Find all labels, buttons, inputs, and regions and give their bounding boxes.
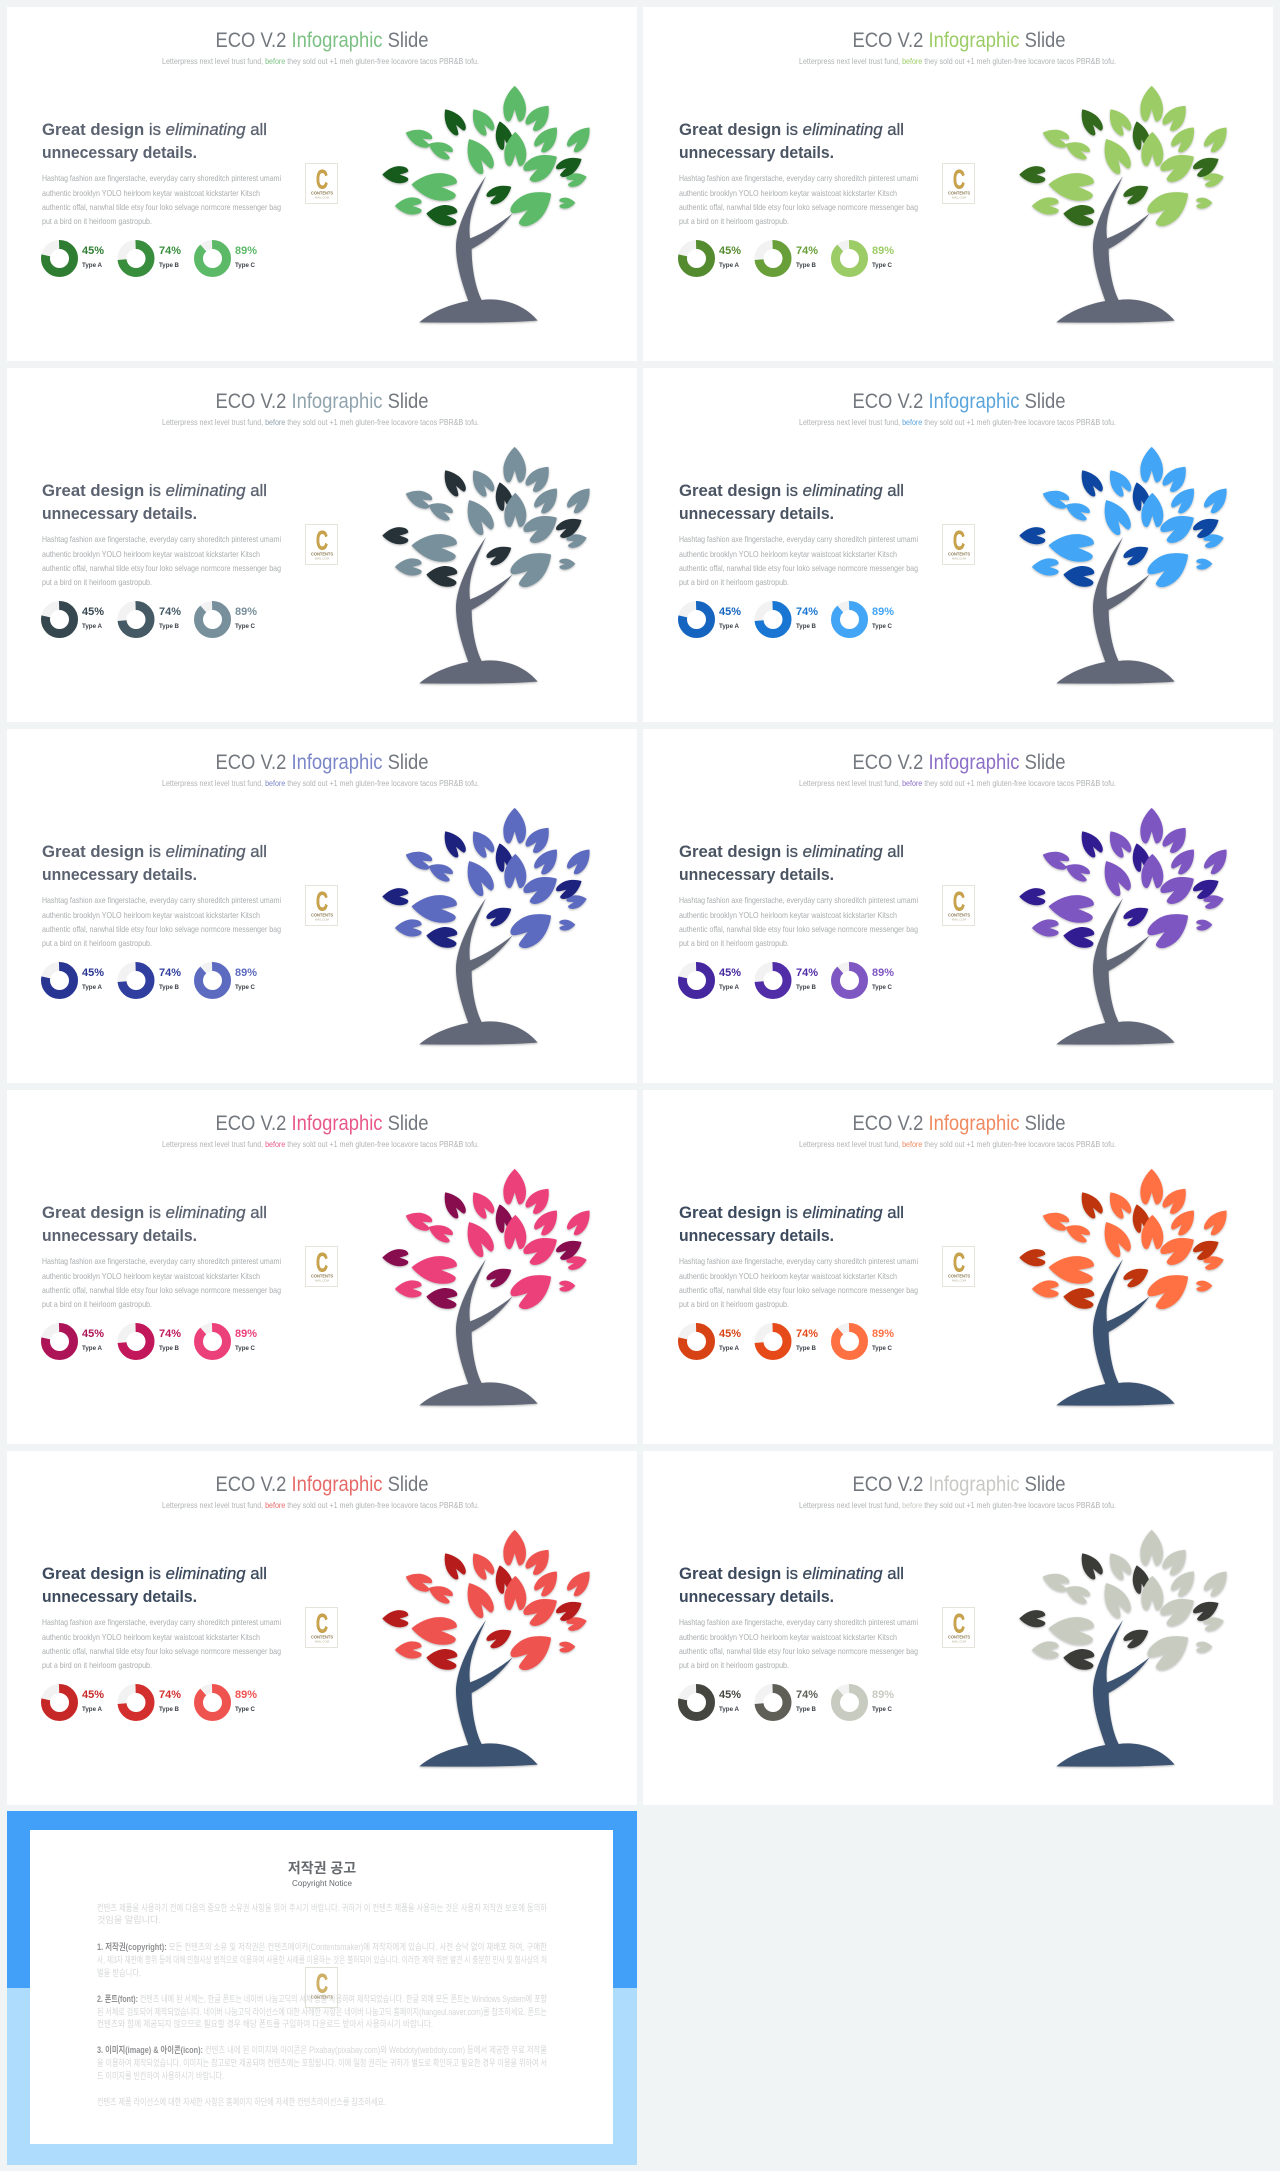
donut: Type B 74%: Type B <box>796 984 816 991</box>
donut: Type B 74%: Type B <box>159 623 179 630</box>
title: ECO V.2 Infographic Slide <box>852 1473 1065 1496</box>
tree illustration <box>382 447 596 684</box>
body text: authentic brooklyn YOLO heirloom keytar waistcoat kickstarter Kitsch <box>42 549 260 559</box>
panel: pink slide <box>7 1090 637 1444</box>
body text: authentic offal, narwhal tilde etsy four loko selvage normcore messenger bag <box>42 924 281 934</box>
heading: unnecessary details. <box>42 1587 197 1606</box>
heading: Great design is eliminating all <box>42 120 267 139</box>
body text: authentic offal, narwhal tilde etsy four loko selvage normcore messenger bag <box>42 202 281 212</box>
donut: Type A 45%: 45% <box>719 606 741 618</box>
body text: Hashtag fashion axe fingerstache, everyday carry shoreditch pinterest umami <box>42 534 281 544</box>
body text <box>42 1617 281 1670</box>
logo badge <box>942 164 974 204</box>
body text: authentic offal, narwhal tilde etsy four loko selvage normcore messenger bag <box>42 1646 281 1656</box>
logo badge: C <box>316 164 328 194</box>
heading: unnecessary details. <box>679 865 834 884</box>
donut: Type A 45%: 45% <box>719 1328 741 1340</box>
donut: Type C 89%: 89% <box>872 967 894 979</box>
title: ECO V.2 Infographic Slide <box>852 751 1065 774</box>
donut: Type A 45%: Type A <box>719 1706 739 1713</box>
body text: Hashtag fashion axe fingerstache, everyday carry shoreditch pinterest umami <box>679 1256 918 1266</box>
donut: Type A 45%: Type A <box>82 623 102 630</box>
logo badge: MAIL.COM <box>952 918 966 922</box>
donut: Type C 89% <box>836 606 894 634</box>
donut: Type B 74%: 74% <box>796 606 818 618</box>
donut: Type C 89%: Type C <box>235 262 255 269</box>
donut: Type A 45%: Type A <box>719 984 739 991</box>
panel: red slide <box>7 1451 637 1805</box>
panel background <box>7 1090 637 1444</box>
body text <box>42 895 281 948</box>
subtitle: Letterpress next level trust fund, before they sold out +1 meh gluten-free locavore tacos PBR&B tofu. <box>162 1501 479 1510</box>
panel: orange slide <box>643 1090 1273 1444</box>
donut: Type B 74% <box>122 606 181 634</box>
donut: Type B 74%: 74% <box>796 967 818 979</box>
logo badge: C <box>316 886 328 916</box>
body text: put a bird on it heirloom gastropub. <box>42 216 152 226</box>
section 1: copyright: 1. 저작권(copyright): 모든 컨텐츠의 소유 및 저작권은 컨텐츠메이커(Contentsmaker)에 저작자에게 있습니다. 사전 승낙 없이 재배포 하여, 구매한 <box>97 1941 547 1952</box>
heading: Great design is eliminating all <box>42 481 267 500</box>
body text: put a bird on it heirloom gastropub. <box>679 1299 789 1309</box>
heading <box>42 1564 267 1606</box>
tree illustration <box>1019 1530 1233 1767</box>
donut: Type C 89% <box>836 1688 894 1716</box>
donut: Type B 74%: Type B <box>159 262 179 269</box>
heading: Great design is eliminating all <box>679 481 904 500</box>
tree illustration <box>1019 808 1233 1045</box>
donut: Type C 89%: Type C <box>872 262 892 269</box>
panel: lime slide <box>643 7 1273 361</box>
donut: Type A 45% <box>682 1328 741 1356</box>
donut: Type C 89%: Type C <box>872 1345 892 1352</box>
body text: put a bird on it heirloom gastropub. <box>42 1299 152 1309</box>
blue frame top <box>7 1811 637 1988</box>
body text: authentic offal, narwhal tilde etsy four loko selvage normcore messenger bag <box>679 924 918 934</box>
donut: Type A 45% <box>682 244 741 272</box>
panel background <box>7 7 637 361</box>
section 1: copyright <box>97 1941 547 1978</box>
intro paragraph <box>97 1902 548 1925</box>
body text <box>42 534 281 587</box>
body text: authentic offal, narwhal tilde etsy four loko selvage normcore messenger bag <box>679 202 918 212</box>
logo badge: MAIL.COM <box>315 1640 329 1644</box>
donut: Type B 74%: 74% <box>796 1689 818 1701</box>
logo badge: C <box>953 886 965 916</box>
donut: Type A 45%: 45% <box>82 1689 104 1701</box>
logo badge <box>306 886 338 926</box>
tree illustration <box>382 1530 596 1767</box>
logo badge watermark: CONTENTS <box>311 1994 333 2000</box>
heading: Great design is eliminating all <box>679 1564 904 1583</box>
donut: Type C 89%: 89% <box>872 1689 894 1701</box>
body text <box>679 534 918 587</box>
heading: Great design is eliminating all <box>679 1203 904 1222</box>
body text: put a bird on it heirloom gastropub. <box>42 577 152 587</box>
logo badge: CONTENTS <box>311 1634 333 1640</box>
donut: Type C 89% <box>836 244 894 272</box>
donut: Type B 74% <box>759 244 818 272</box>
heading <box>42 842 267 884</box>
donut: Type A 45%: 45% <box>719 1689 741 1701</box>
panel background <box>643 1451 1273 1805</box>
body text: authentic offal, narwhal tilde etsy four loko selvage normcore messenger bag <box>42 1285 281 1295</box>
donut: Type B 74%: Type B <box>159 1706 179 1713</box>
heading: unnecessary details. <box>42 1226 197 1245</box>
logo badge: CONTENTS <box>311 912 333 918</box>
section 3: images and icons <box>97 2044 547 2081</box>
donut: Type C 89% <box>836 1328 894 1356</box>
section 3: images and icons: 드 이미지를 빈칸하여 사용하시기 바랍니다. <box>97 2070 224 2081</box>
donut: Type A 45% <box>46 966 104 994</box>
logo badge: CONTENTS <box>311 190 333 196</box>
title: ECO V.2 Infographic Slide <box>852 29 1065 52</box>
donut: Type A 45%: 45% <box>719 245 741 257</box>
heading: Great design is eliminating all <box>42 1564 267 1583</box>
logo badge: C <box>316 1608 328 1638</box>
heading: Great design is eliminating all <box>679 842 904 861</box>
title: ECO V.2 Infographic Slide <box>852 1112 1065 1135</box>
tree illustration <box>382 808 596 1045</box>
heading: unnecessary details. <box>679 504 834 523</box>
heading: unnecessary details. <box>42 865 197 884</box>
donut: Type B 74% <box>122 1688 181 1716</box>
tree illustration <box>382 86 596 323</box>
donut: Type A 45%: Type A <box>82 262 102 269</box>
heading <box>42 1203 267 1245</box>
donut: Type A 45% <box>46 244 104 272</box>
donut: Type C 89%: Type C <box>872 984 892 991</box>
donut: Type A 45%: 45% <box>82 606 104 618</box>
body text: Hashtag fashion axe fingerstache, everyday carry shoreditch pinterest umami <box>679 895 918 905</box>
section 1: copyright: 사, 제3자 재판매 행위 등에 대해 민형사상 법적으로 이용하여 사용한 사례를 이용하는 것은 불허되어 있습니다. 이러한 계약 위반 발견 시 충분한 민사 및 형사상의 처 <box>97 1954 547 1965</box>
donut: Type B 74%: Type B <box>159 984 179 991</box>
title: ECO V.2 Infographic Slide <box>216 1112 428 1135</box>
title: ECO V.2 Infographic Slide <box>216 390 428 413</box>
body text: put a bird on it heirloom gastropub. <box>42 938 152 948</box>
body text <box>679 173 918 226</box>
body text: authentic brooklyn YOLO heirloom keytar waistcoat kickstarter Kitsch <box>679 188 897 198</box>
subtitle: Letterpress next level trust fund, before they sold out +1 meh gluten-free locavore tacos PBR&B tofu. <box>799 1140 1116 1149</box>
heading <box>679 481 904 523</box>
donut: Type A 45% <box>46 1688 104 1716</box>
body text: authentic brooklyn YOLO heirloom keytar waistcoat kickstarter Kitsch <box>679 1632 897 1642</box>
donut: Type C 89%: 89% <box>872 606 894 618</box>
section 3: images and icons: 을 이용하여 제작되었습니다. 이미지는 참고로만 제공되며 컨텐츠에는 포함됩니다. 이에 일정 권리는 귀하가 별도로 확인하고 필요한 경우 이용을 위하여 서 <box>97 2057 547 2068</box>
title: ECO V.2 Infographic Slide <box>216 1473 428 1496</box>
body text <box>42 1256 281 1309</box>
section 2: font: 2. 폰트(font): 컨텐츠 내에 된 서체는, 한글 폰트는 네이버 나눔고딕의 서체 등을 사용하여 제작되었습니다. 한글 외에 모든 폰트는 Windows System에 포함 <box>97 1993 547 2004</box>
closing line: 컨텐츠 제품 라이선스에 대한 자세한 사항은 홈페이지 하단에 자세한 컨텐츠라이선스를 참조하세요. <box>97 2096 386 2107</box>
body text: put a bird on it heirloom gastropub. <box>679 216 789 226</box>
body text: authentic brooklyn YOLO heirloom keytar waistcoat kickstarter Kitsch <box>42 1632 260 1642</box>
donut: Type B 74%: 74% <box>159 1689 181 1701</box>
donut: Type C 89%: Type C <box>235 623 255 630</box>
body text: authentic offal, narwhal tilde etsy four loko selvage normcore messenger bag <box>679 563 918 573</box>
subtitle: Letterpress next level trust fund, before they sold out +1 meh gluten-free locavore tacos PBR&B tofu. <box>799 57 1116 66</box>
donut: Type A 45% <box>46 1328 104 1356</box>
title: ECO V.2 Infographic Slide <box>852 390 1065 413</box>
section 2: font: 된 서체로 검토되어 제작되었습니다. 네이버 나눔고딕 라이선스에 대한 사례한 사항은 네이버 나눔고딕 홈페이지(hangeul.naver.com)를 참조하세요. 폰트는 <box>97 2006 547 2017</box>
donut: Type C 89% <box>836 966 894 994</box>
panel background <box>7 729 637 1083</box>
logo badge: MAIL.COM <box>315 196 329 200</box>
logo badge <box>306 1608 338 1648</box>
donut: Type B 74% <box>759 1688 818 1716</box>
heading <box>42 120 267 162</box>
title: ECO V.2 Infographic Slide <box>216 751 428 774</box>
body text: authentic brooklyn YOLO heirloom keytar waistcoat kickstarter Kitsch <box>42 910 260 920</box>
logo badge: C <box>953 526 965 556</box>
logo badge: CONTENTS <box>948 1634 970 1640</box>
donut: Type C 89%: Type C <box>872 1706 892 1713</box>
donut: Type A 45%: 45% <box>82 245 104 257</box>
logo badge: C <box>316 526 328 556</box>
donut: Type B 74% <box>759 1328 818 1356</box>
body text: authentic offal, narwhal tilde etsy four loko selvage normcore messenger bag <box>42 563 281 573</box>
logo badge <box>942 886 974 926</box>
heading <box>42 481 267 523</box>
body text: put a bird on it heirloom gastropub. <box>42 1660 152 1670</box>
body text: put a bird on it heirloom gastropub. <box>679 577 789 587</box>
intro paragraph: 것임을 알립니다. <box>97 1914 161 1925</box>
donut: Type B 74% <box>122 1328 181 1356</box>
logo badge watermark: C <box>316 1968 328 1998</box>
donut: Type C 89%: Type C <box>235 1706 255 1713</box>
logo badge: MAIL.COM <box>952 558 966 560</box>
subtitle: Letterpress next level trust fund, before they sold out +1 meh gluten-free locavore tacos PBR&B tofu. <box>162 779 479 788</box>
donut: Type A 45% <box>682 966 741 994</box>
body text: authentic offal, narwhal tilde etsy four loko selvage normcore messenger bag <box>679 1646 918 1656</box>
body text: authentic brooklyn YOLO heirloom keytar waistcoat kickstarter Kitsch <box>42 188 260 198</box>
notice subheading: Copyright Notice <box>292 1878 352 1888</box>
donut: Type B 74%: 74% <box>159 606 181 618</box>
logo badge: MAIL.COM <box>315 1280 329 1282</box>
logo badge <box>306 524 338 564</box>
heading: unnecessary details. <box>42 504 197 523</box>
logo badge: MAIL.COM <box>315 918 329 922</box>
donut: Type A 45%: 45% <box>82 1328 104 1340</box>
donut: Type B 74%: 74% <box>159 967 181 979</box>
panel background <box>643 7 1273 361</box>
body text: put a bird on it heirloom gastropub. <box>679 1660 789 1670</box>
logo badge <box>942 524 974 564</box>
tree illustration <box>1019 86 1233 323</box>
body text: Hashtag fashion axe fingerstache, everyday carry shoreditch pinterest umami <box>42 895 281 905</box>
section 2: font <box>97 1993 547 2029</box>
donut: Type C 89%: Type C <box>235 984 255 991</box>
light blue frame bottom <box>7 1988 637 2165</box>
panel: blue-grey slide <box>7 368 637 722</box>
heading: unnecessary details. <box>679 1587 834 1606</box>
logo badge <box>306 164 338 204</box>
donut: Type B 74%: Type B <box>796 262 816 269</box>
panel background <box>643 729 1273 1083</box>
intro paragraph: 컨텐츠 제품을 사용하기 전에 다음의 중요한 소유권 사항을 읽어 주시기 바랍니다. 귀하가 이 컨텐츠 제품을 사용하는 것은 사용자 저작권 보호에 동의하 <box>97 1902 548 1913</box>
body text: Hashtag fashion axe fingerstache, everyday carry shoreditch pinterest umami <box>679 534 918 544</box>
tree illustration <box>1019 447 1233 684</box>
logo badge: C <box>953 1248 965 1278</box>
body text <box>679 895 918 948</box>
logo badge <box>942 1608 974 1648</box>
donut: Type B 74%: Type B <box>796 1345 816 1352</box>
donut: Type B 74%: 74% <box>159 245 181 257</box>
donut: Type C 89%: 89% <box>235 1689 257 1701</box>
body text: authentic brooklyn YOLO heirloom keytar waistcoat kickstarter Kitsch <box>679 549 897 559</box>
panel background <box>7 368 637 722</box>
panel background <box>7 1451 637 1805</box>
donut: Type B 74%: Type B <box>796 1706 816 1713</box>
donut: Type C 89% <box>198 606 257 634</box>
logo badge: MAIL.COM <box>315 558 329 560</box>
donut: Type C 89%: Type C <box>235 1345 255 1352</box>
section 2: font: 컨텐츠와 함께 제공되지 않으므로 필요할 경우 해당 폰트를 구입하여 다운로드 받아서 사용하시기 바랍니다. <box>97 2018 433 2029</box>
donut: Type B 74%: 74% <box>159 1328 181 1340</box>
logo badge: C <box>953 164 965 194</box>
body text <box>42 173 281 226</box>
heading: unnecessary details. <box>679 1226 834 1245</box>
donut: Type B 74%: Type B <box>796 623 816 630</box>
donut: Type C 89%: 89% <box>235 967 257 979</box>
body text: Hashtag fashion axe fingerstache, everyday carry shoreditch pinterest umami <box>679 173 918 183</box>
panel: green slide <box>7 7 637 361</box>
heading <box>679 842 904 884</box>
tree illustration <box>1019 1169 1233 1406</box>
donut: Type A 45%: 45% <box>719 967 741 979</box>
donut: Type A 45% <box>46 606 104 634</box>
title: ECO V.2 Infographic Slide <box>216 29 428 52</box>
heading: Great design is eliminating all <box>42 1203 267 1222</box>
donut: Type C 89%: 89% <box>235 1328 257 1340</box>
donut: Type C 89%: 89% <box>872 1328 894 1340</box>
logo badge: MAIL.COM <box>952 1280 966 1282</box>
subtitle: Letterpress next level trust fund, before they sold out +1 meh gluten-free locavore tacos PBR&B tofu. <box>799 1501 1116 1510</box>
subtitle: Letterpress next level trust fund, before they sold out +1 meh gluten-free locavore tacos PBR&B tofu. <box>799 779 1116 788</box>
body text: Hashtag fashion axe fingerstache, everyday carry shoreditch pinterest umami <box>679 1617 918 1627</box>
donut: Type C 89%: 89% <box>235 245 257 257</box>
heading <box>679 1564 904 1606</box>
donut: Type B 74% <box>759 966 818 994</box>
heading: unnecessary details. <box>679 143 834 162</box>
logo badge: CONTENTS <box>948 552 970 556</box>
logo badge: CONTENTS <box>948 912 970 918</box>
notice heading: 저작권 공고 <box>288 1860 356 1876</box>
logo badge: CONTENTS <box>948 190 970 196</box>
donut: Type A 45%: 45% <box>82 967 104 979</box>
logo badge: MAIL.COM <box>952 1640 966 1644</box>
donut: Type A 45%: Type A <box>719 262 739 269</box>
donut: Type C 89% <box>198 1328 257 1356</box>
body text: authentic brooklyn YOLO heirloom keytar waistcoat kickstarter Kitsch <box>42 1271 260 1281</box>
donut: Type B 74% <box>759 606 818 634</box>
heading: Great design is eliminating all <box>42 842 267 861</box>
heading: unnecessary details. <box>42 143 197 162</box>
body text: Hashtag fashion axe fingerstache, everyday carry shoreditch pinterest umami <box>42 1256 281 1266</box>
panel: grey slide <box>643 1451 1273 1805</box>
donut: Type A 45%: Type A <box>82 1706 102 1713</box>
panel: purple slide <box>643 729 1273 1083</box>
heading <box>679 1203 904 1245</box>
donut: Type C 89%: 89% <box>235 606 257 618</box>
donut: Type B 74% <box>122 966 181 994</box>
tree illustration <box>382 1169 596 1406</box>
heading: Great design is eliminating all <box>679 120 904 139</box>
subtitle: Letterpress next level trust fund, before they sold out +1 meh gluten-free locavore tacos PBR&B tofu. <box>162 418 479 427</box>
logo badge: CONTENTS <box>311 1274 333 1278</box>
logo badge: MAIL.COM <box>952 196 966 200</box>
donut: Type C 89%: 89% <box>872 245 894 257</box>
donut: Type C 89% <box>198 966 257 994</box>
body text <box>679 1617 918 1670</box>
panel: copyright notice <box>7 1811 637 2165</box>
donut: Type A 45%: Type A <box>82 984 102 991</box>
donut: Type B 74%: Type B <box>159 1345 179 1352</box>
subtitle: Letterpress next level trust fund, before they sold out +1 meh gluten-free locavore tacos PBR&B tofu. <box>162 57 479 66</box>
donut: Type C 89% <box>198 1688 257 1716</box>
logo badge watermark <box>306 1968 338 2008</box>
donut: Type C 89%: Type C <box>872 623 892 630</box>
body text: Hashtag fashion axe fingerstache, everyday carry shoreditch pinterest umami <box>42 1617 281 1627</box>
donut: Type B 74%: 74% <box>796 245 818 257</box>
subtitle: Letterpress next level trust fund, before they sold out +1 meh gluten-free locavore tacos PBR&B tofu. <box>162 1140 479 1149</box>
donut: Type A 45%: Type A <box>719 623 739 630</box>
logo badge: CONTENTS <box>948 1274 970 1278</box>
donut: Type C 89% <box>198 244 257 272</box>
donut: Type A 45% <box>682 1688 741 1716</box>
donut: Type B 74% <box>122 244 181 272</box>
body text: authentic brooklyn YOLO heirloom keytar waistcoat kickstarter Kitsch <box>679 1271 897 1281</box>
panel: blue slide <box>643 368 1273 722</box>
donut: Type B 74%: 74% <box>796 1328 818 1340</box>
heading <box>679 120 904 162</box>
logo badge <box>942 1246 974 1286</box>
panel background <box>643 368 1273 722</box>
body text: put a bird on it heirloom gastropub. <box>679 938 789 948</box>
logo badge: C <box>953 1608 965 1638</box>
panel: indigo slide <box>7 729 637 1083</box>
logo badge: C <box>316 1248 328 1278</box>
white notice card <box>30 1830 613 2144</box>
donut: Type A 45%: Type A <box>719 1345 739 1352</box>
section 1: copyright: 벌을 받습니다. <box>97 1968 141 1978</box>
donut: Type A 45% <box>682 606 741 634</box>
panel background <box>643 1090 1273 1444</box>
logo badge: CONTENTS <box>311 552 333 556</box>
body text: authentic offal, narwhal tilde etsy four loko selvage normcore messenger bag <box>679 1285 918 1295</box>
body text: authentic brooklyn YOLO heirloom keytar waistcoat kickstarter Kitsch <box>679 910 897 920</box>
body text <box>679 1256 918 1309</box>
donut: Type A 45%: Type A <box>82 1345 102 1352</box>
subtitle: Letterpress next level trust fund, before they sold out +1 meh gluten-free locavore tacos PBR&B tofu. <box>799 418 1116 427</box>
body text: Hashtag fashion axe fingerstache, everyday carry shoreditch pinterest umami <box>42 173 281 183</box>
logo badge <box>306 1246 338 1286</box>
section 3: images and icons: 3. 이미지(image) & 아이콘(icon): 컨텐츠 내에 된 이미지와 아이콘은 Pixabay(pixabay.com)와 Webdoty(webdoty.com) 등에서 제공한 무료 저작물 <box>97 2044 547 2055</box>
